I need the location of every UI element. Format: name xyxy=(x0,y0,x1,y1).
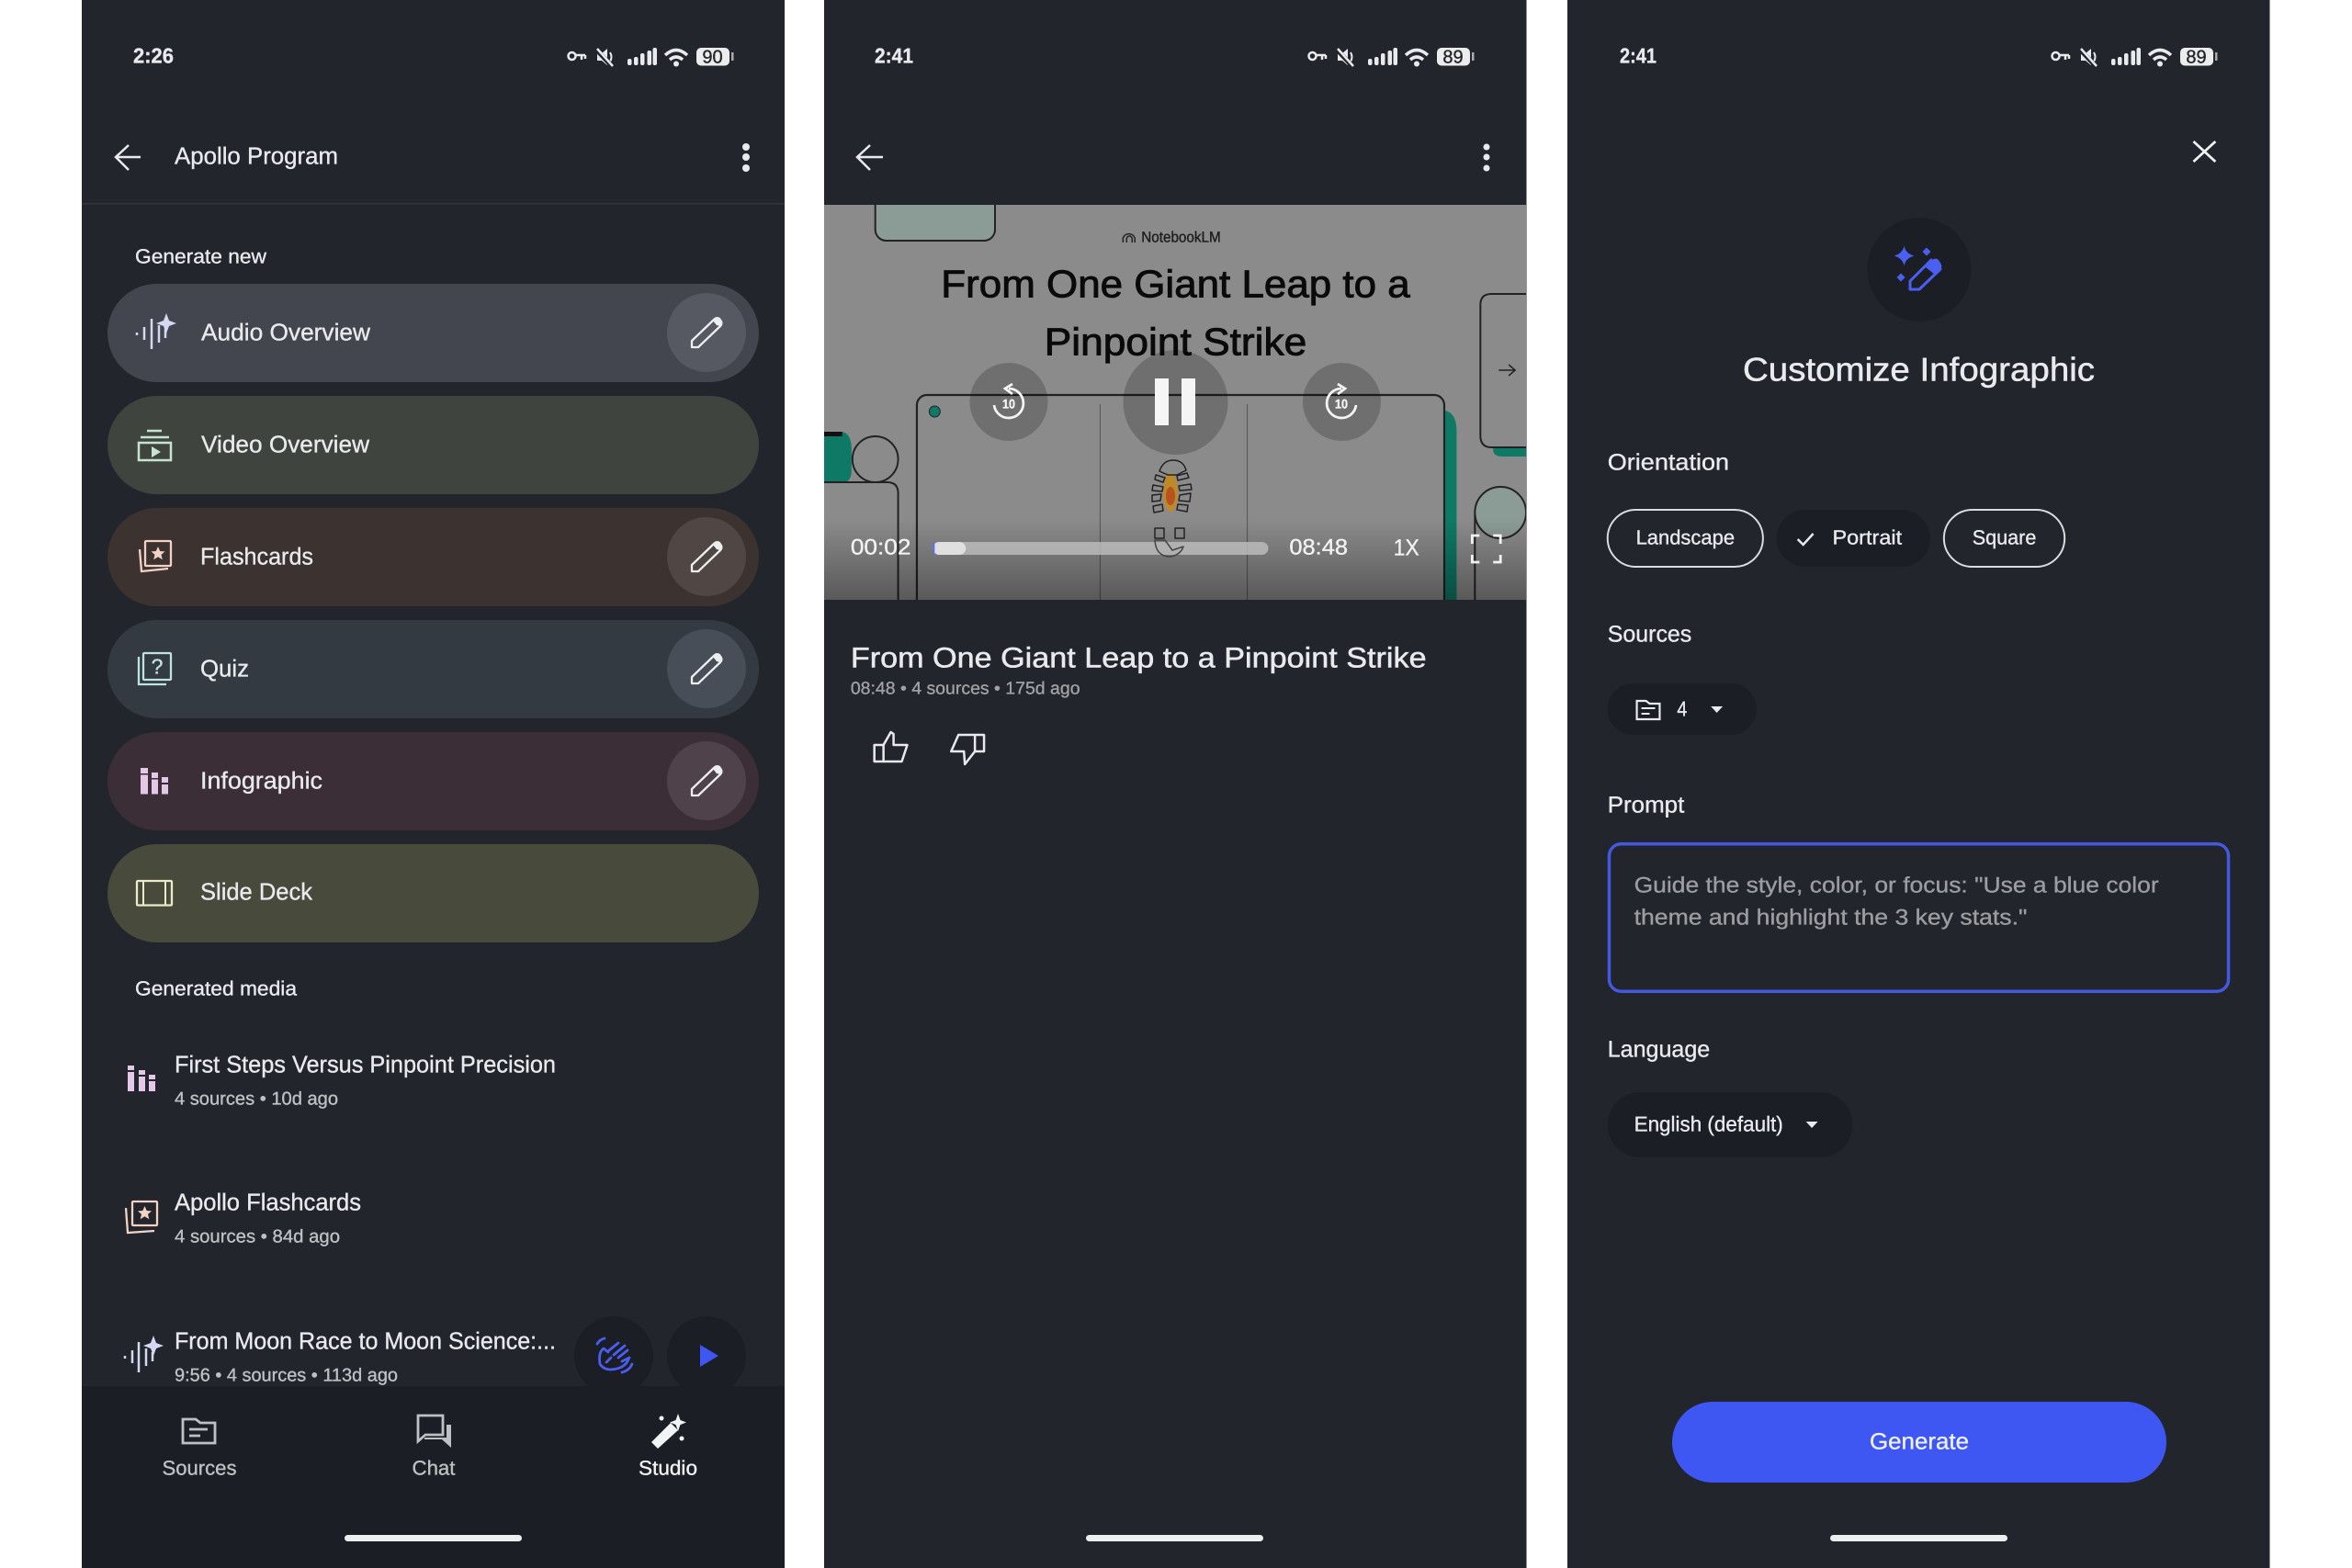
dropdown: sources xyxy=(1608,683,1757,735)
button: infographic xyxy=(107,732,759,830)
media item: apollo flashcards: Apollo Flashcards xyxy=(175,1189,361,1216)
button: flashcards: Flashcards xyxy=(200,542,313,570)
label: orientation: Orientation xyxy=(1608,450,1729,476)
button: slide deck xyxy=(107,844,759,942)
media item: apollo flashcards xyxy=(126,1189,361,1247)
customize form content xyxy=(1608,141,2229,1157)
status bar: 89 xyxy=(1442,48,1464,68)
video content and details xyxy=(818,188,1531,764)
status bar xyxy=(875,44,1474,68)
home indicator xyxy=(1086,1535,1263,1541)
boot print xyxy=(1152,460,1192,557)
media item: first steps: First Steps Versus Pinpoint Precision xyxy=(175,1051,556,1078)
heading: generate new: Generate new xyxy=(135,244,266,268)
playback bar: 08:48 xyxy=(1289,535,1348,560)
status bar xyxy=(133,44,733,68)
nav: studio: Studio xyxy=(639,1457,697,1479)
control: rewind 10: 10 xyxy=(1002,397,1015,412)
icon: sparkle pencil xyxy=(1867,218,1972,321)
status bar: 2:41 xyxy=(1620,44,1657,68)
video title artwork: Pinpoint Strike xyxy=(1045,320,1306,364)
status bar: 2:41 xyxy=(875,44,913,68)
button: slide deck: Slide Deck xyxy=(200,878,313,906)
video title artwork: NotebookLM xyxy=(1141,230,1221,246)
video title artwork xyxy=(941,230,1410,364)
media item: moon race: From Moon Race to Moon Science:... xyxy=(175,1326,556,1354)
media item: moon race: 9:56 • 4 sources • 113d ago xyxy=(175,1365,398,1385)
nav: sources xyxy=(162,1419,237,1479)
home indicator xyxy=(1830,1535,2007,1541)
dropdown: sources: 4 xyxy=(1677,696,1687,720)
nav: studio xyxy=(639,1414,697,1479)
chip: square xyxy=(1944,510,2064,567)
heading: customize infographic: Customize Infographic xyxy=(1743,351,2095,388)
icon: thumbs up xyxy=(875,732,908,761)
header xyxy=(82,141,785,204)
label: language: Language xyxy=(1608,1036,1710,1062)
label: prompt: Prompt xyxy=(1608,792,1684,818)
video title artwork: From One Giant Leap to a xyxy=(941,263,1410,305)
playback bar: 1X xyxy=(1394,535,1419,560)
video artwork shapes xyxy=(818,188,1531,615)
button: generate: Generate xyxy=(1870,1429,1969,1455)
panel: studio screen xyxy=(82,0,785,1568)
button: flashcards xyxy=(107,508,759,606)
control: forward 10 xyxy=(1303,363,1381,441)
media item: apollo flashcards: 4 sources • 84d ago xyxy=(175,1227,340,1247)
button: audio overview xyxy=(107,284,759,382)
media item: moon race xyxy=(125,1326,556,1385)
control: pause xyxy=(1123,350,1227,455)
playback bar: 00:02 xyxy=(851,535,910,560)
chip: landscape: Landscape xyxy=(1636,525,1735,549)
playback bar xyxy=(851,535,1500,562)
button: quiz: ? xyxy=(152,654,163,678)
status bar xyxy=(1620,44,2218,68)
panel: customize infographic screen xyxy=(1567,0,2269,1568)
button: audio overview: Audio Overview xyxy=(201,318,370,345)
button: quiz xyxy=(107,620,759,718)
status bar: 2:26 xyxy=(133,44,174,68)
media item: first steps xyxy=(128,1051,556,1110)
label: sources: Sources xyxy=(1608,621,1691,647)
chip: square: Square xyxy=(1973,525,2036,549)
prompt input: theme and highlight the 3 key stats." xyxy=(1634,906,2027,930)
media item: first steps: 4 sources • 10d ago xyxy=(175,1089,338,1110)
heading: generated media: Generated media xyxy=(135,977,298,999)
nav: chat xyxy=(412,1416,456,1479)
icon: thumbs down xyxy=(951,735,984,764)
video metadata: 08:48 • 4 sources • 175d ago xyxy=(851,680,1080,698)
nav: chat: Chat xyxy=(412,1457,456,1479)
chip: portrait selected xyxy=(1777,510,1930,567)
button: generate xyxy=(1672,1402,2166,1483)
video frame xyxy=(818,188,1531,615)
prompt input: Guide the style, color, or focus: "Use a blue color xyxy=(1634,873,2159,898)
icon: close xyxy=(2193,141,2215,162)
status bar: 90 xyxy=(702,48,723,68)
dropdown: language xyxy=(1608,1092,1852,1157)
panel: video player screen xyxy=(818,0,1531,1568)
chip: portrait selected: Portrait xyxy=(1832,525,1902,549)
control: forward 10: 10 xyxy=(1335,397,1348,412)
header: Apollo Program xyxy=(175,141,338,169)
control: rewind 10 xyxy=(970,363,1047,441)
status bar: 89 xyxy=(2186,48,2207,68)
header: back and menu xyxy=(857,143,1490,171)
button: video overview: Video Overview xyxy=(201,430,369,457)
prompt input xyxy=(1609,844,2229,991)
button: play xyxy=(667,1316,746,1395)
nav: sources: Sources xyxy=(162,1457,237,1479)
dropdown: language: English (default) xyxy=(1634,1111,1783,1135)
button: interactive wave xyxy=(574,1316,653,1395)
chip: landscape xyxy=(1608,510,1763,567)
button: infographic: Infographic xyxy=(200,766,322,794)
button: quiz: Quiz xyxy=(200,654,249,682)
video title: From One Giant Leap to a Pinpoint Strike xyxy=(851,641,1427,674)
bottom navigation xyxy=(82,1386,785,1568)
button: video overview xyxy=(107,396,759,494)
